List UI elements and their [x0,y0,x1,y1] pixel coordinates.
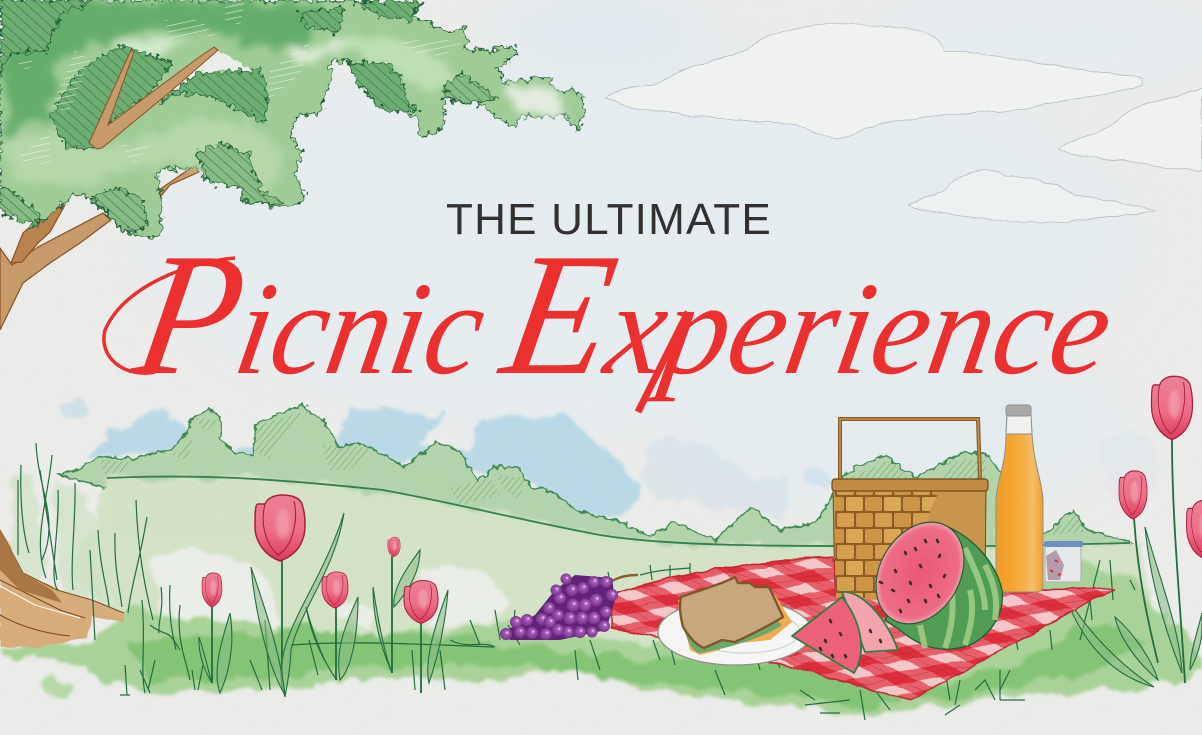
white meadow patches [150,550,510,630]
picnic basket [832,419,988,600]
picnic blanket [612,556,1115,700]
basket body [833,490,986,598]
grape stem [600,575,638,590]
slice: rear [842,592,898,652]
bottle glass and juice [996,415,1043,592]
cheese and lettuce [678,595,792,655]
tulip: right tall [1152,376,1192,440]
basket handle [840,419,980,479]
grape shadow [503,575,615,640]
bread [680,577,783,648]
dark hatched leaf clumps [0,0,497,230]
tulip: large [255,495,305,561]
title: Picnic Experience: Picnic [122,218,502,412]
melon flesh [858,506,982,640]
tulip: middle [322,572,348,608]
title: THE ULTIMATE: THE ULTIMATE [446,195,772,244]
title: Picnic Experience: Experience [488,218,1129,412]
cloud: large [605,24,1142,140]
seeds [880,540,945,612]
plate [658,599,812,665]
jar [1044,541,1083,582]
bush hatching [100,410,1085,535]
stems [212,438,1185,693]
basket rim [832,479,988,491]
canopy shading [4,2,570,195]
tree [0,0,585,648]
slice seeds [820,620,881,657]
watermelon half [858,506,1002,649]
grapes [500,574,638,640]
canopy [0,0,585,238]
tulip: right small [1119,471,1147,519]
leaf hatching [0,0,497,230]
tulip stems and leaves [199,438,1202,697]
slice: front [792,597,861,673]
hill line [107,476,1130,546]
grass wash [0,470,1202,716]
distant tree line [59,405,1132,570]
tulip: bud [388,537,400,557]
melon rind [885,525,1002,649]
cloud: right [1058,88,1202,172]
juice bottle [996,405,1043,592]
ground line [291,643,494,647]
clouds [605,24,1202,223]
sandwich on plate [658,577,812,665]
white hatched highlights [15,0,465,165]
rind stripes [920,548,996,648]
sky gap in canopy [165,50,254,96]
title: Picnic Experience [104,218,1129,412]
bottle cap [1006,405,1031,416]
tulips [202,376,1202,623]
bottle empty neck [1006,415,1032,434]
trunk and branches [0,165,199,330]
basket front overlap [835,556,985,600]
tulip: small left [202,573,222,607]
leaves [199,513,1202,697]
meadow hill [70,476,1150,640]
cloud: small [908,170,1156,223]
basket weave [835,490,940,600]
tulip: open [404,581,438,623]
grass blades and tufts [18,443,1135,720]
tree root [0,530,124,648]
upper branches [89,47,218,149]
sky watercolor wash [62,0,1202,520]
tulip: right edge [1186,501,1202,557]
watermelon slices [792,592,898,673]
